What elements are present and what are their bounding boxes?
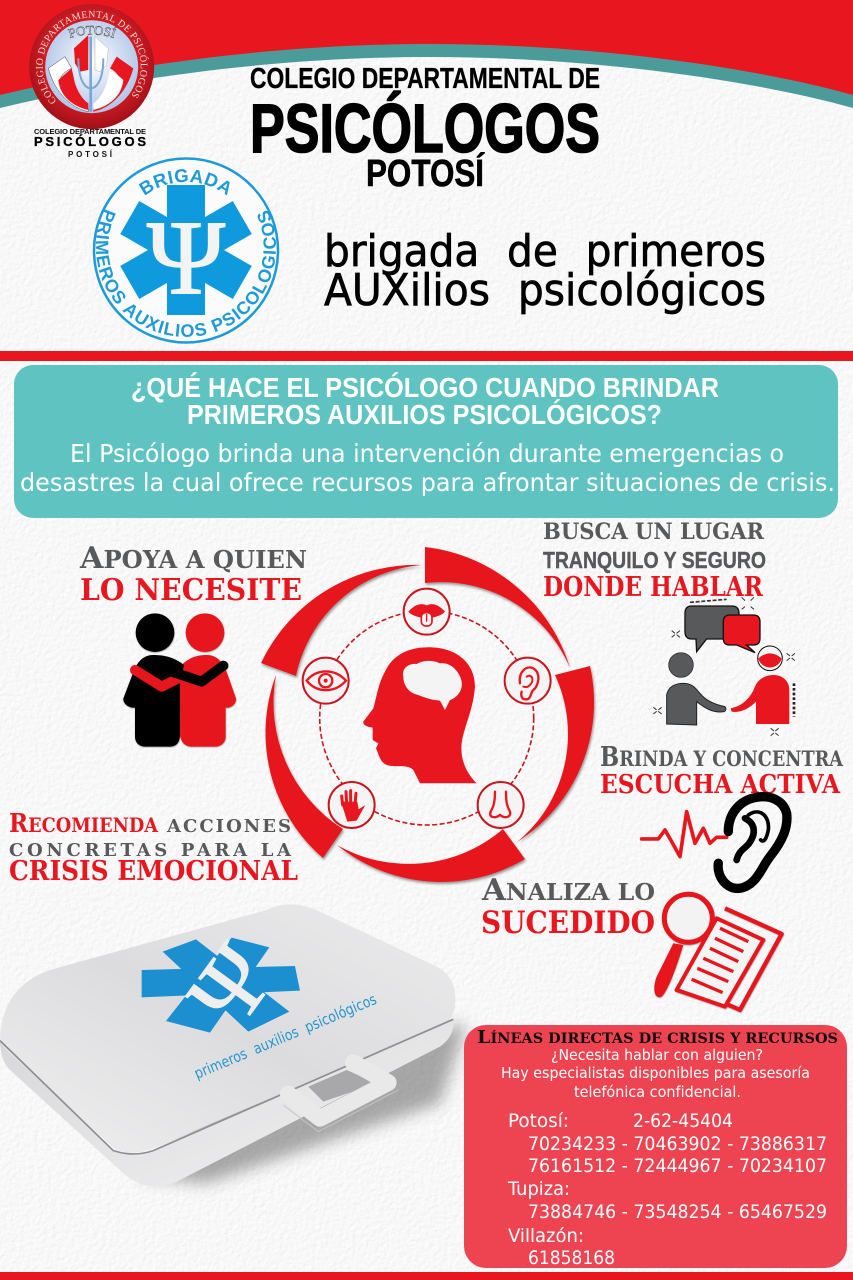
icon: two people embracing — [123, 613, 236, 747]
title: Colegio Departamental de Psicólogos Potosí: POTOSÍ — [366, 151, 485, 195]
icon: ear — [505, 658, 551, 704]
logo caption: POTOSÍ — [68, 150, 113, 159]
heading: Recomienda acciones concretas para la crisis emocional: CONCRETAS PARA LA — [9, 840, 292, 861]
icon: nose — [478, 782, 524, 828]
phone numbers list: Villazón: — [508, 1225, 584, 1247]
subtitle: brigada de primeros auxilios psicológicos: brigada de primeros — [324, 226, 766, 277]
phone numbers list: Potosí: — [508, 1110, 569, 1132]
heading: Recomienda acciones concretas para la crisis emocional: RECOMIENDA — [9, 809, 158, 839]
panel heading: ¿QUÉ HACE EL PSICÓLOGO CUANDO BRINDAR — [131, 372, 719, 403]
icon: tongue — [404, 589, 450, 635]
red swoosh ring — [261, 547, 594, 882]
left person — [667, 653, 726, 725]
logo caption: COLEGIO DEPARTAMENTAL DE — [34, 127, 146, 136]
phone numbers list: 76161512 - 72444967 - 70234107 — [528, 1155, 827, 1177]
badge ring text: PRIMEROS AUXILIOS PSICOLOGICOS — [96, 210, 276, 337]
panel heading: LÍNEAS DIRECTAS DE CRISIS Y RECURSOS — [477, 1027, 838, 1048]
subtitle: brigada de primeros auxilios psicológicos — [324, 226, 766, 316]
heading: Busca un lugar tranquilo y seguro donde hablar: DONDE HABLAR — [543, 572, 763, 603]
icon: hand — [329, 782, 375, 828]
heading: Analiza lo sucedido — [481, 873, 655, 941]
icon: two people talking — [653, 597, 795, 736]
heading: Apoya a quien lo necesite: APOYA A QUIEN — [79, 541, 307, 576]
heading: Analiza lo sucedido: ANALIZA LO — [481, 873, 655, 908]
panel intro text — [501, 1046, 810, 1101]
case handle — [283, 1063, 398, 1132]
panel intro text: telefónica confidencial. — [574, 1083, 741, 1101]
panel heading — [131, 372, 719, 430]
case lid — [0, 904, 455, 1153]
phone numbers list: Tupiza: — [507, 1178, 570, 1200]
heading: Apoya a quien lo necesite — [79, 541, 307, 608]
panel body text — [20, 439, 835, 497]
red divider bar — [0, 351, 853, 361]
phone numbers list: 2-62-45404 — [633, 1110, 733, 1132]
phone numbers list: 73884746 - 73548254 - 65467529 — [528, 1201, 827, 1223]
heading: Recomienda acciones concretas para la crisis emocional: CRISIS EMOCIONAL — [9, 856, 298, 887]
badge: Brigada Primeros Auxilios Psicológicos — [92, 157, 280, 344]
title: Colegio Departamental de Psicólogos Potosí: PSICÓLOGOS — [250, 90, 600, 167]
grey speech bubble — [685, 606, 739, 652]
case lower shell — [0, 1018, 454, 1186]
heading: Apoya a quien lo necesite: LO NECESITE — [80, 573, 302, 608]
case label text: primeros auxilios psicológicos — [192, 990, 379, 1083]
panel: crisis hotlines — [464, 1025, 847, 1269]
right person — [731, 646, 794, 724]
icon: ear with sound pulse — [642, 797, 787, 888]
logo caption — [34, 127, 146, 159]
icon: magnifier over document — [654, 894, 782, 1010]
icon: head with brain — [363, 647, 477, 783]
icon: star of life — [120, 185, 252, 315]
icon: psi symbol: Ψ — [147, 199, 225, 316]
diagram: senses around the head — [261, 547, 594, 882]
phone numbers list: 61858168 — [528, 1247, 615, 1269]
phone numbers list: 70234233 - 70463902 - 73886317 — [528, 1133, 827, 1155]
logo: Colegio Departamental de Psicólogos Potosí: POTOSÍ — [68, 26, 118, 38]
red speech bubble — [723, 615, 760, 653]
top red and teal header band — [0, 0, 853, 108]
heading: Recomienda acciones concretas para la crisis emocional — [9, 809, 298, 887]
panel body text: El Psicólogo brinda una intervención durante emergencias o — [70, 439, 784, 468]
title: Colegio Departamental de Psicólogos Potosí — [250, 63, 600, 195]
heading: Busca un lugar tranquilo y seguro donde hablar — [543, 519, 766, 603]
logo caption: PSICÓLOGOS — [34, 134, 146, 149]
panel body text: desastres la cual ofrece recursos para afrontar situaciones de crisis. — [20, 468, 835, 497]
case psi symbol: Ψ — [167, 925, 296, 1046]
heading: Analiza lo sucedido: SUCEDIDO — [481, 905, 655, 941]
illustration: first aid case — [0, 904, 467, 1186]
heading: Busca un lugar tranquilo y seguro donde hablar: BUSCA UN LUGAR — [543, 519, 765, 545]
heading: Busca un lugar tranquilo y seguro donde hablar: TRANQUILO Y SEGURO — [543, 547, 766, 573]
panel intro text: Hay especialistas disponibles para asesoría — [501, 1064, 810, 1082]
panel: what the psychologist does — [14, 365, 838, 518]
panel heading: PRIMEROS AUXILIOS PSICOLÓGICOS? — [187, 399, 662, 430]
phone numbers list — [507, 1110, 827, 1269]
icon: eye — [303, 658, 349, 704]
heading: Recomienda acciones concretas para la crisis emocional: ACCIONES — [166, 816, 291, 837]
heading: Brinda y concentra escucha activa — [600, 742, 844, 800]
bottom red bar — [0, 1272, 853, 1280]
title: Colegio Departamental de Psicólogos Potosí: COLEGIO DEPARTAMENTAL DE — [250, 63, 600, 95]
subtitle: brigada de primeros auxilios psicológicos: AUXilios psicológicos — [324, 265, 766, 316]
badge top text: BRIGADA — [138, 169, 230, 196]
logo: Colegio Departamental de Psicólogos Potosí: COLEGIO DEPARTAMENTAL DE PSICÓLOGOS — [36, 10, 149, 104]
panel intro text: ¿Necesita hablar con alguien? — [551, 1046, 763, 1064]
case star of life — [142, 938, 300, 1033]
